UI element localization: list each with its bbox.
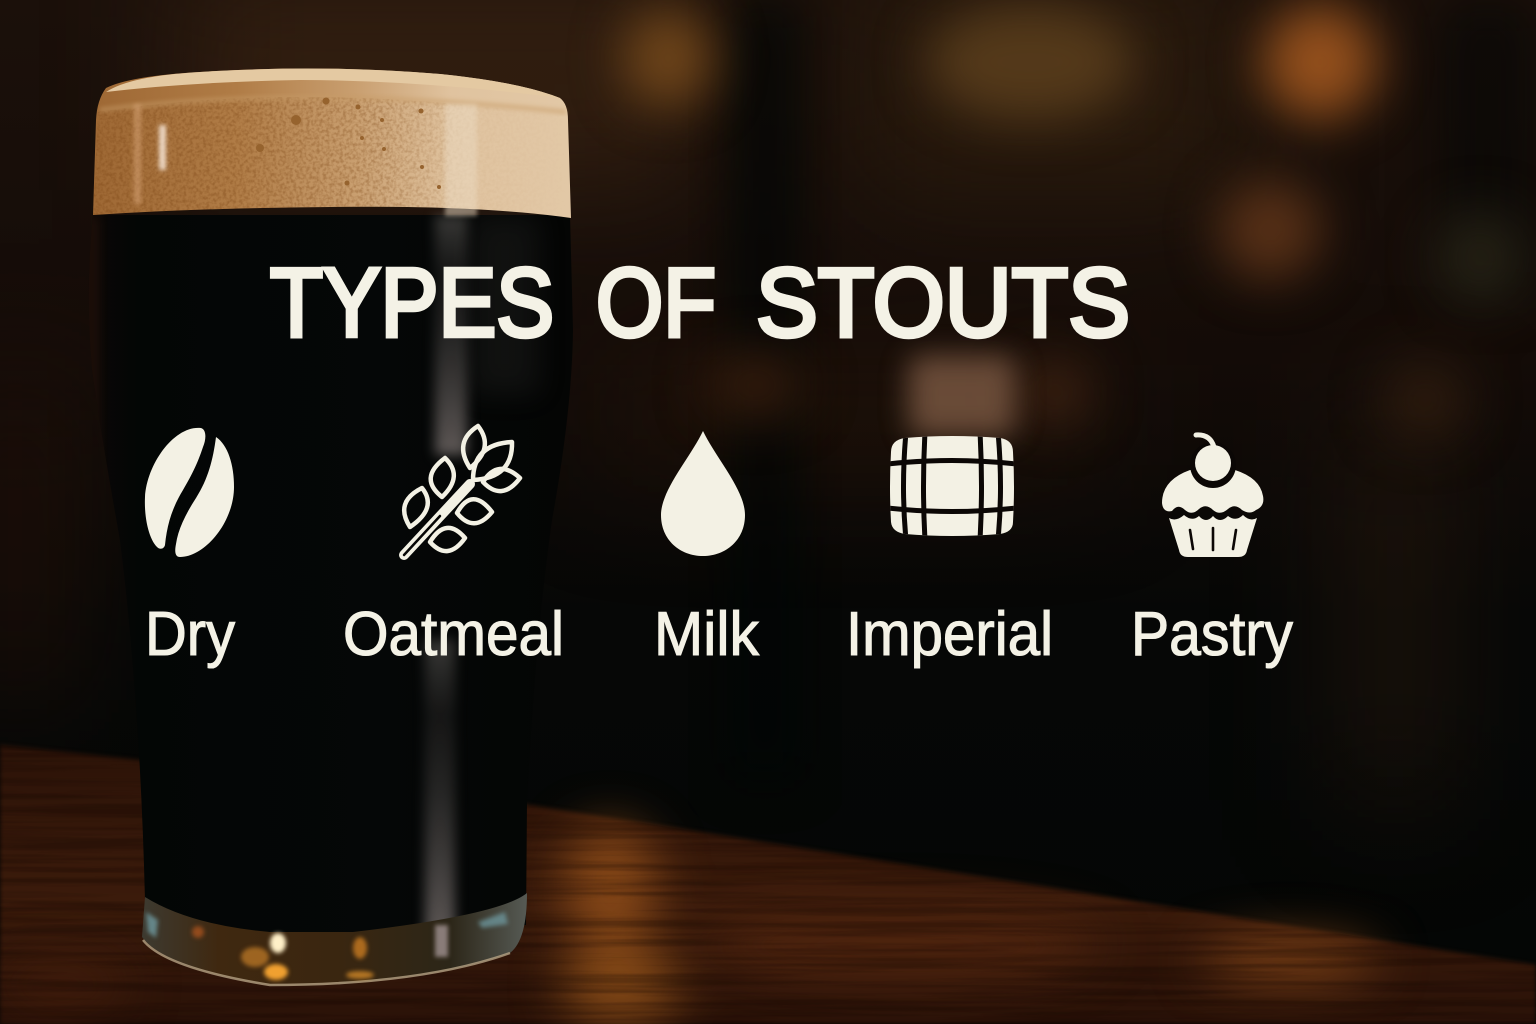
stout type: Oatmeal [343, 426, 564, 669]
icon: oat sprig [404, 426, 520, 555]
foam glass highlights [134, 104, 477, 216]
icon: coffee bean [145, 428, 234, 557]
glass body with dark beer [89, 215, 573, 939]
icon: cupcake [1162, 435, 1263, 557]
foam bubble texture [93, 97, 571, 218]
foam bubbles [256, 98, 441, 189]
stout type: Milk [654, 431, 760, 669]
icon: milk drop [661, 431, 745, 556]
stout type: Pastry [1131, 435, 1293, 669]
glass base [142, 893, 527, 985]
label: Milk: Milk [654, 600, 760, 669]
icon: barrel [890, 436, 1014, 536]
title: TYPES [270, 248, 554, 357]
stout pint glass [85, 68, 573, 985]
foam head [93, 68, 571, 218]
stout type: Imperial [846, 430, 1053, 669]
title: OF [596, 248, 716, 357]
label: Pastry: Pastry [1131, 600, 1293, 669]
title: STOUTS [756, 248, 1130, 357]
label: Imperial: Imperial [846, 600, 1053, 669]
title [270, 248, 1130, 357]
stout type: Dry [145, 428, 235, 669]
foam rim [106, 68, 560, 98]
label: Oatmeal: Oatmeal [343, 600, 564, 669]
label: Dry: Dry [145, 600, 235, 669]
wooden bar table [0, 745, 1536, 1024]
